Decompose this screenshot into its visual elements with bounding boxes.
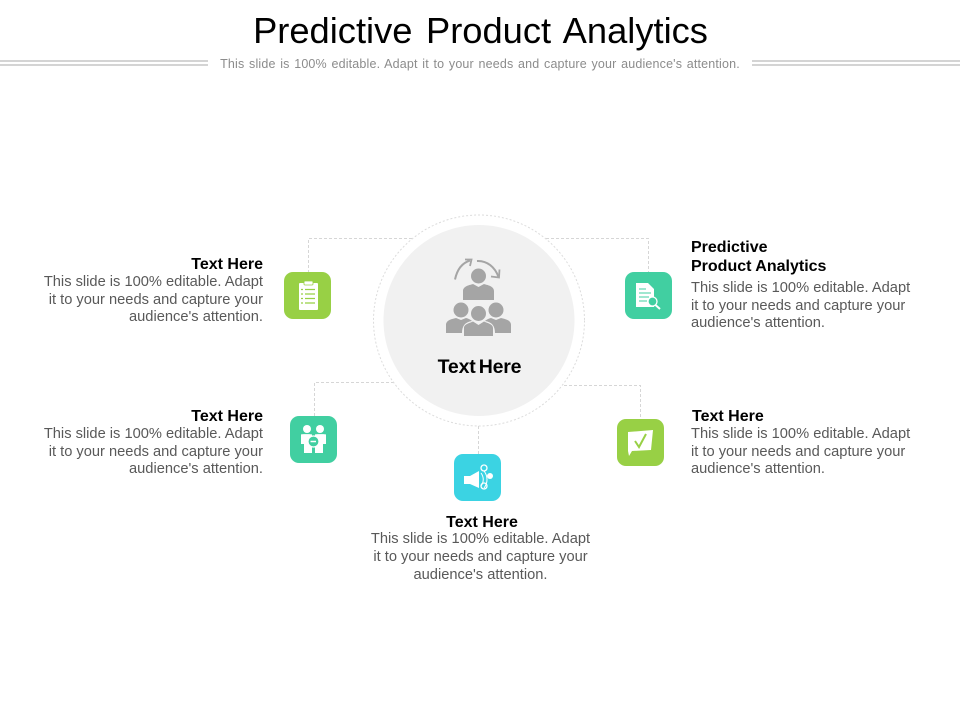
- icon: document magnifier: [625, 272, 672, 319]
- subtitle: This slide is 100% editable. Adapt it to your needs and capture your audience's attention.: [220, 57, 740, 71]
- description: it to your needs and capture your: [49, 444, 263, 460]
- heading: Product Analytics: [691, 258, 827, 275]
- description: audience's attention.: [129, 461, 263, 477]
- header rule left: [0, 60, 208, 66]
- description: it to your needs and capture your: [49, 292, 263, 308]
- title: Predictive Product Analytics: [253, 10, 708, 51]
- heading: Text Here: [191, 408, 263, 425]
- heading: Predictive: [691, 239, 768, 256]
- icon: clipboard checklist: [284, 272, 331, 319]
- icon: speech check: [617, 419, 664, 466]
- heading: Text Here: [446, 514, 518, 531]
- item: top left: [44, 256, 331, 325]
- description: it to your needs and capture your: [691, 298, 905, 314]
- heading: Text Here: [191, 256, 263, 273]
- description: This slide is 100% editable. Adapt: [371, 531, 590, 547]
- description: This slide is 100% editable. Adapt: [44, 274, 263, 290]
- header rule right: [752, 60, 960, 66]
- item: bottom: [371, 454, 590, 583]
- center label: Text Here: [438, 356, 522, 378]
- description: audience's attention.: [691, 461, 825, 477]
- heading: Text Here: [692, 408, 764, 425]
- description: audience's attention.: [691, 315, 825, 331]
- icon: megaphone: [454, 454, 501, 501]
- description: audience's attention.: [414, 567, 548, 583]
- description: audience's attention.: [129, 309, 263, 325]
- description: it to your needs and capture your: [691, 444, 905, 460]
- description: This slide is 100% editable. Adapt: [691, 426, 910, 442]
- connector lines: [308, 238, 648, 454]
- item: middle right: [617, 408, 910, 477]
- icon: two people: [290, 416, 337, 463]
- description: This slide is 100% editable. Adapt: [44, 426, 263, 442]
- item: middle left: [44, 408, 337, 477]
- description: This slide is 100% editable. Adapt: [691, 280, 910, 296]
- icon: people with rotating arrows: [446, 260, 511, 336]
- description: it to your needs and capture your: [373, 549, 588, 565]
- central circle: [374, 215, 584, 426]
- item: top right: [625, 239, 910, 331]
